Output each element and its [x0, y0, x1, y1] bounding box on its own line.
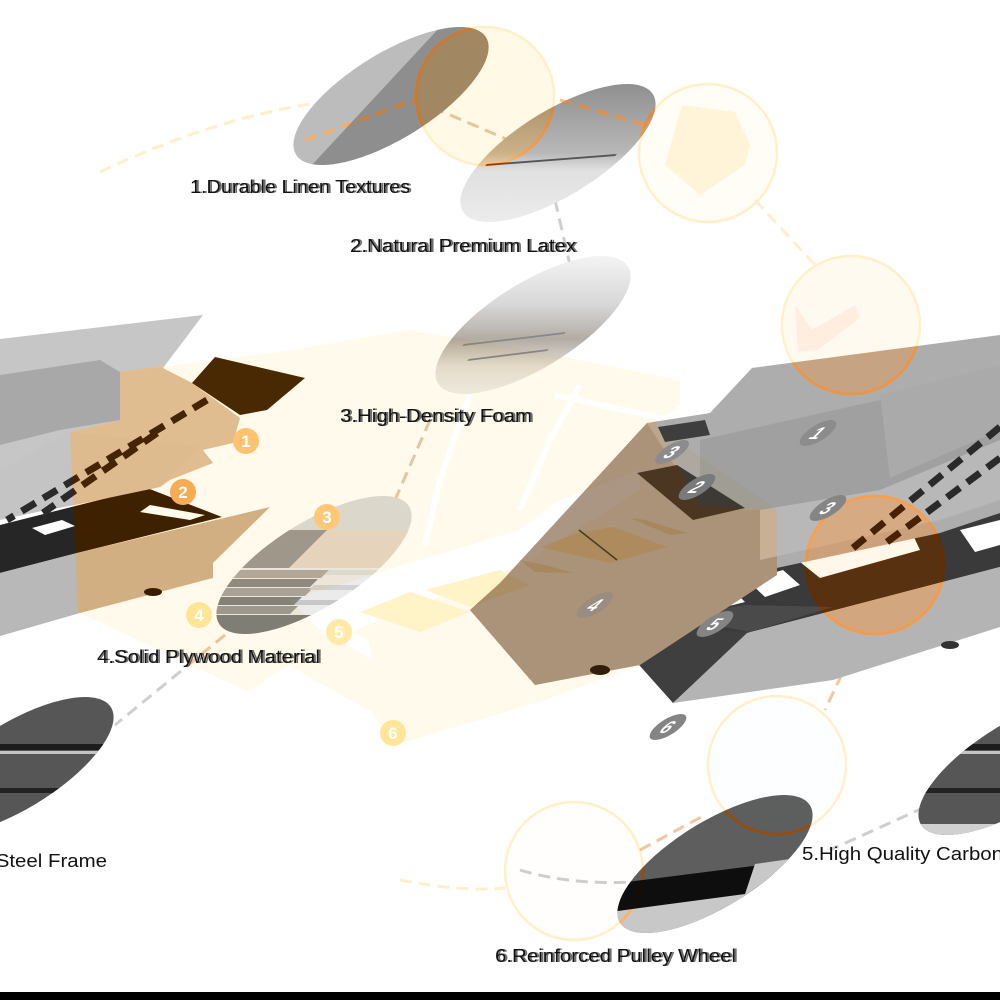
gray badge 6: 6: [653, 718, 681, 737]
sheared detail 6: pulley wheel: [617, 795, 813, 933]
label 1: 1.Durable Linen Textures: [192, 177, 412, 197]
badge 1: [233, 428, 259, 454]
sheared detail 5: steel frame (left): [0, 697, 114, 822]
badge 2: [170, 479, 196, 505]
wheels: [590, 665, 610, 675]
badge 5: 5: [334, 623, 344, 642]
badge 4: 4: [194, 606, 204, 625]
diagonal black bars: [853, 427, 1000, 548]
sheared detail 4: plywood: [216, 496, 412, 634]
label 4: 4.Solid Plywood Material: [99, 647, 322, 667]
gray badge 6: [642, 714, 694, 740]
gray badge 3: [802, 495, 854, 521]
left rail: [0, 507, 270, 636]
bottom black bar: [0, 992, 1000, 1000]
label 2: 2.Natural Premium Latex: [352, 236, 578, 256]
badge 5: [326, 619, 352, 645]
label 3: 3.High-Density Foam: [340, 406, 532, 426]
gray sheared number badges: [569, 420, 854, 740]
pale detail circles: [416, 27, 944, 940]
sofa body: [470, 335, 1000, 685]
sheared detail 5: steel frame (right wrap): [918, 726, 1000, 835]
label 6: 6.Reinforced Pulley Wheel: [497, 946, 738, 966]
left frame: [0, 488, 222, 573]
gray badge 2: [671, 474, 723, 500]
armrest tray top: [658, 420, 710, 442]
gray badge 2: 2: [682, 478, 710, 497]
gray badge 5: [689, 611, 741, 637]
gray badge 4: 4: [580, 596, 609, 615]
label 4: 4.Solid Plywood Material: [97, 647, 320, 667]
frame with slats: [660, 513, 1000, 640]
label 3: 3.High-Density Foam: [342, 406, 534, 426]
badge 6: [380, 720, 406, 746]
left dark storage box: [192, 357, 305, 415]
label 1: 1.Durable Linen Textures: [190, 177, 410, 197]
chroma tint layer over sofa and circles: [70, 27, 944, 940]
lower left darker seat: [470, 423, 777, 685]
badge 3: [314, 504, 340, 530]
gold seat patches: [520, 518, 687, 573]
badge 6: 6: [388, 724, 398, 743]
label 5: [0, 844, 1000, 871]
gray badge top: 3: [657, 443, 685, 462]
badge 3: 3: [322, 508, 332, 527]
sheared detail 2: latex: [460, 84, 656, 222]
badge 4: [186, 602, 212, 628]
label 2: 2.Natural Premium Latex: [350, 236, 576, 256]
gray badge top: [648, 440, 696, 464]
label 6: 6.Reinforced Pulley Wheel: [495, 946, 736, 966]
gray badge 1: [792, 420, 844, 446]
left cushions: [0, 315, 240, 520]
left diagonal bars: [7, 400, 207, 520]
sofa: right section: [470, 335, 1000, 703]
rail: [673, 567, 1000, 703]
gray badge 5: 5: [700, 615, 728, 634]
left wheel: [144, 588, 162, 596]
gray badge 4: [569, 592, 621, 618]
sheared detail 1: linen: [293, 27, 489, 165]
gray badge 1: 1: [803, 424, 831, 443]
gray badge 3: 3: [813, 499, 841, 518]
sheared detail 3: foam: [436, 256, 630, 394]
armrest tray lower: [637, 465, 745, 520]
gray dashed connector lines: [115, 100, 925, 882]
dark underside: [632, 628, 750, 703]
pale dashed connectors: [100, 104, 815, 889]
pale ghost of sofa: [70, 330, 777, 745]
orange number badges: [170, 428, 406, 746]
badge 2: 2: [178, 483, 188, 502]
back cushions shading: [700, 370, 1000, 510]
badge 1: 1: [241, 432, 251, 451]
sofa: left section: [0, 315, 305, 636]
side frame bars: [604, 595, 660, 672]
